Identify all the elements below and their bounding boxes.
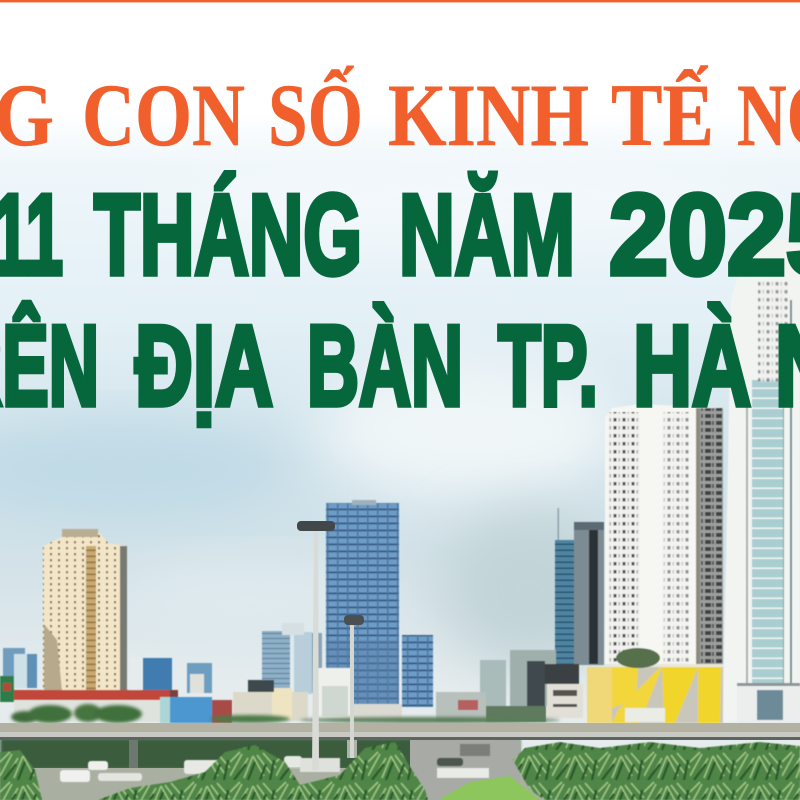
tower: twin blue towers — [262, 623, 322, 694]
title line 2: NĂM — [399, 172, 575, 299]
street lamp: tall — [297, 521, 335, 770]
tower: distant left blue buildings — [3, 648, 212, 693]
palms: centre group — [98, 742, 428, 800]
top orange rule — [0, 0, 800, 2]
low-rise block with red roof — [0, 676, 178, 722]
tower: white apartment tower — [605, 404, 723, 664]
tower: glass curved tower — [723, 237, 800, 722]
white vehicles — [60, 744, 490, 782]
road and lawn — [0, 768, 800, 800]
lower scene: overpass and road — [0, 723, 800, 800]
dark tree belt — [0, 738, 520, 770]
trees on mall roof — [616, 648, 660, 668]
grey road right of centre — [410, 740, 520, 800]
tower: cream apartment block — [43, 529, 127, 691]
title line 1 — [0, 65, 800, 165]
mid-rise cluster — [233, 668, 402, 721]
palms: right group — [513, 742, 800, 800]
title line 2: THÁNG — [94, 172, 362, 299]
title line 1: SỐ — [268, 65, 363, 165]
title line 1: TẾ — [611, 65, 714, 165]
overpass piers — [129, 740, 357, 768]
title line 1: KINH — [388, 67, 589, 165]
title line 2 — [0, 172, 800, 299]
low white building far right — [737, 683, 800, 722]
title line 3: BÀN — [307, 303, 463, 430]
street lamp: short — [344, 615, 364, 758]
mall: yellow shopping centre — [587, 664, 723, 723]
overpass deck — [0, 723, 800, 740]
tower: low buildings right of centre — [436, 650, 583, 722]
tower: right blue block — [402, 635, 433, 707]
tower: tall blue glass block — [326, 500, 399, 715]
skyline — [0, 237, 800, 723]
title line 3: TP. — [498, 303, 598, 430]
blue mural and red building — [160, 697, 232, 723]
tree line behind overpass — [11, 704, 560, 723]
palms: left corner — [0, 750, 42, 800]
title line 3: HÀ — [633, 303, 751, 430]
title line 3 — [0, 303, 800, 430]
lawn — [438, 776, 540, 800]
title line 1: CON — [82, 67, 245, 165]
palm trees foreground — [0, 742, 800, 800]
title line 3: ĐỊA — [135, 303, 273, 430]
tower: distant spire and dark tower — [555, 508, 604, 665]
